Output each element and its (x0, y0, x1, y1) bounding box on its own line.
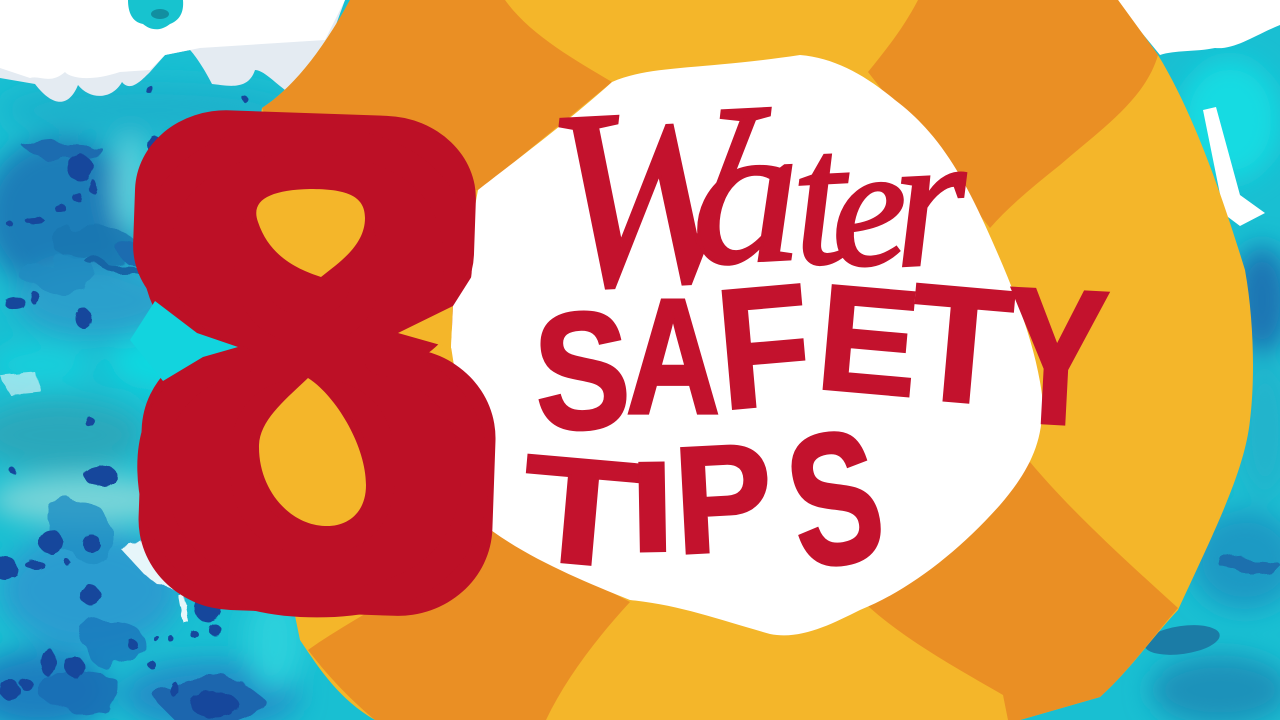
word SAFETY: S (530, 275, 634, 466)
script word Water (540, 48, 973, 342)
word TIPS: T (515, 424, 646, 600)
script word Water: a (685, 82, 806, 308)
white beside right notch of 8 (451, 276, 500, 376)
script word Water: t (787, 93, 855, 306)
orange segment top-left (262, 0, 612, 200)
ring base (230, 0, 1253, 720)
left notch of 8 showing water (130, 301, 238, 381)
big number 8 (118, 4, 502, 720)
word SAFETY: F (710, 248, 818, 445)
upper hole of 8 (256, 189, 365, 277)
word SAFETY (530, 247, 1112, 467)
teal paint spot (128, 0, 183, 29)
word SAFETY: A (626, 266, 720, 448)
script word Water: W (540, 48, 782, 342)
lens shaped blue stain (1142, 621, 1222, 659)
orange segment lower-left (308, 520, 630, 720)
script word Water: r (887, 94, 973, 308)
title (515, 48, 1112, 609)
word TIPS (515, 389, 897, 609)
white centre of ring (450, 55, 1042, 635)
word SAFETY: Y (1001, 247, 1112, 467)
orange segment lower-right (868, 462, 1178, 720)
word TIPS: I (629, 435, 676, 579)
white streak on right edge (1203, 107, 1265, 226)
orange segment top-right (868, 0, 1158, 228)
word TIPS: P (670, 411, 776, 586)
numeral: 8 (118, 4, 502, 720)
script word Water: e (826, 111, 911, 303)
white paint patches (0, 372, 190, 622)
white sky top-left with scalloped wave edge (0, 0, 345, 102)
word TIPS: S (773, 389, 897, 609)
lower hole of 8 (259, 378, 366, 526)
right notch of 8 showing ring (398, 306, 453, 348)
lobes backing the numeral (130, 107, 499, 619)
word SAFETY: T (903, 249, 1019, 440)
white sky top-right (1115, 0, 1280, 55)
word SAFETY: E (811, 252, 926, 428)
lifebuoy ring (230, 0, 1253, 720)
